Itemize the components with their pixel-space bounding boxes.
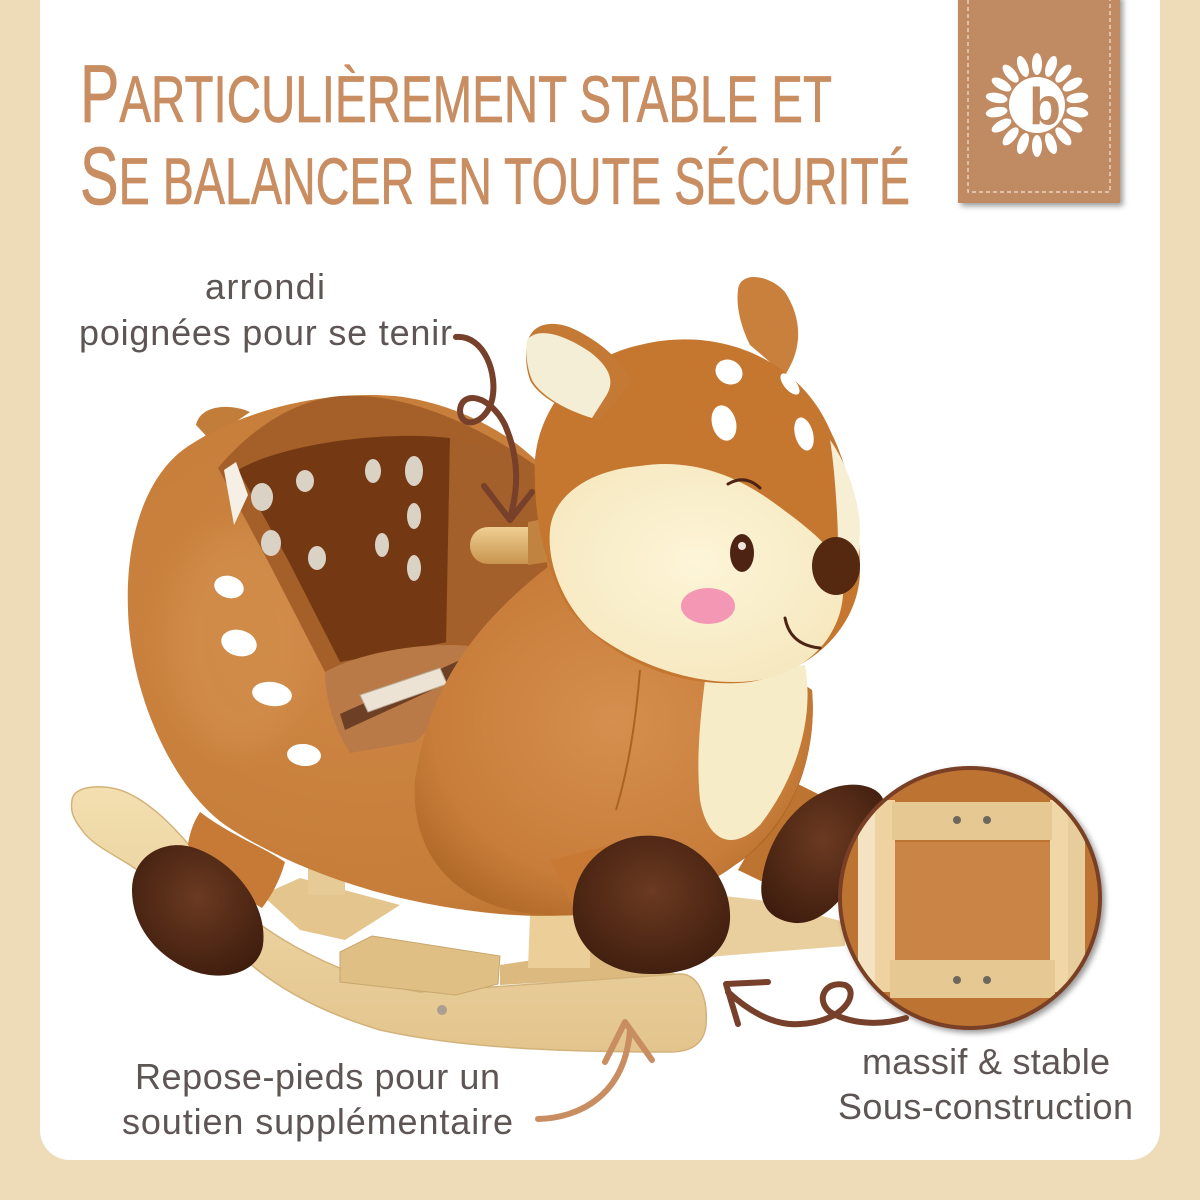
far leg and hoof	[738, 780, 885, 923]
label: footrest: Repose-pieds pour un	[135, 1056, 500, 1097]
label tag	[224, 462, 248, 525]
mouth	[785, 618, 820, 648]
wooden rocker base	[71, 787, 845, 1052]
label: construction	[838, 1041, 1133, 1127]
label: footrest	[122, 1056, 513, 1142]
seat spots	[251, 456, 423, 581]
rear ear-like tail	[196, 407, 250, 440]
label: handles	[79, 266, 452, 353]
title	[80, 49, 910, 222]
seat interior back	[218, 396, 548, 672]
front ear	[526, 324, 632, 420]
brand tag with logo: b	[1029, 78, 1061, 136]
seat pad	[325, 645, 478, 753]
nose	[812, 537, 860, 595]
arrow: footrest	[538, 1022, 652, 1119]
label: handles: poignées pour se tenir	[79, 312, 452, 353]
title: PARTICULIÈREMENT STABLE ET	[80, 49, 832, 140]
label: footrest: soutien supplémentaire	[122, 1101, 513, 1142]
brand tag with logo	[958, 0, 1120, 203]
handle	[470, 518, 550, 565]
label: construction: Sous-construction	[838, 1086, 1133, 1127]
front hoof	[550, 836, 730, 974]
arrow: construction	[726, 982, 906, 1024]
seat shell and body	[128, 395, 813, 916]
arrow: handles	[456, 337, 532, 520]
label: construction: massif & stable	[862, 1041, 1110, 1082]
belt and buckle	[340, 652, 480, 730]
detail circle: underside	[838, 766, 1102, 1030]
rocking toy deer photo	[71, 277, 885, 1052]
side spots	[212, 572, 322, 767]
label: handles: arrondi	[205, 266, 325, 307]
head	[526, 277, 860, 683]
back leg and hoof	[132, 812, 285, 976]
eye	[730, 534, 754, 572]
chest body front	[415, 565, 813, 915]
cheek	[681, 588, 735, 624]
